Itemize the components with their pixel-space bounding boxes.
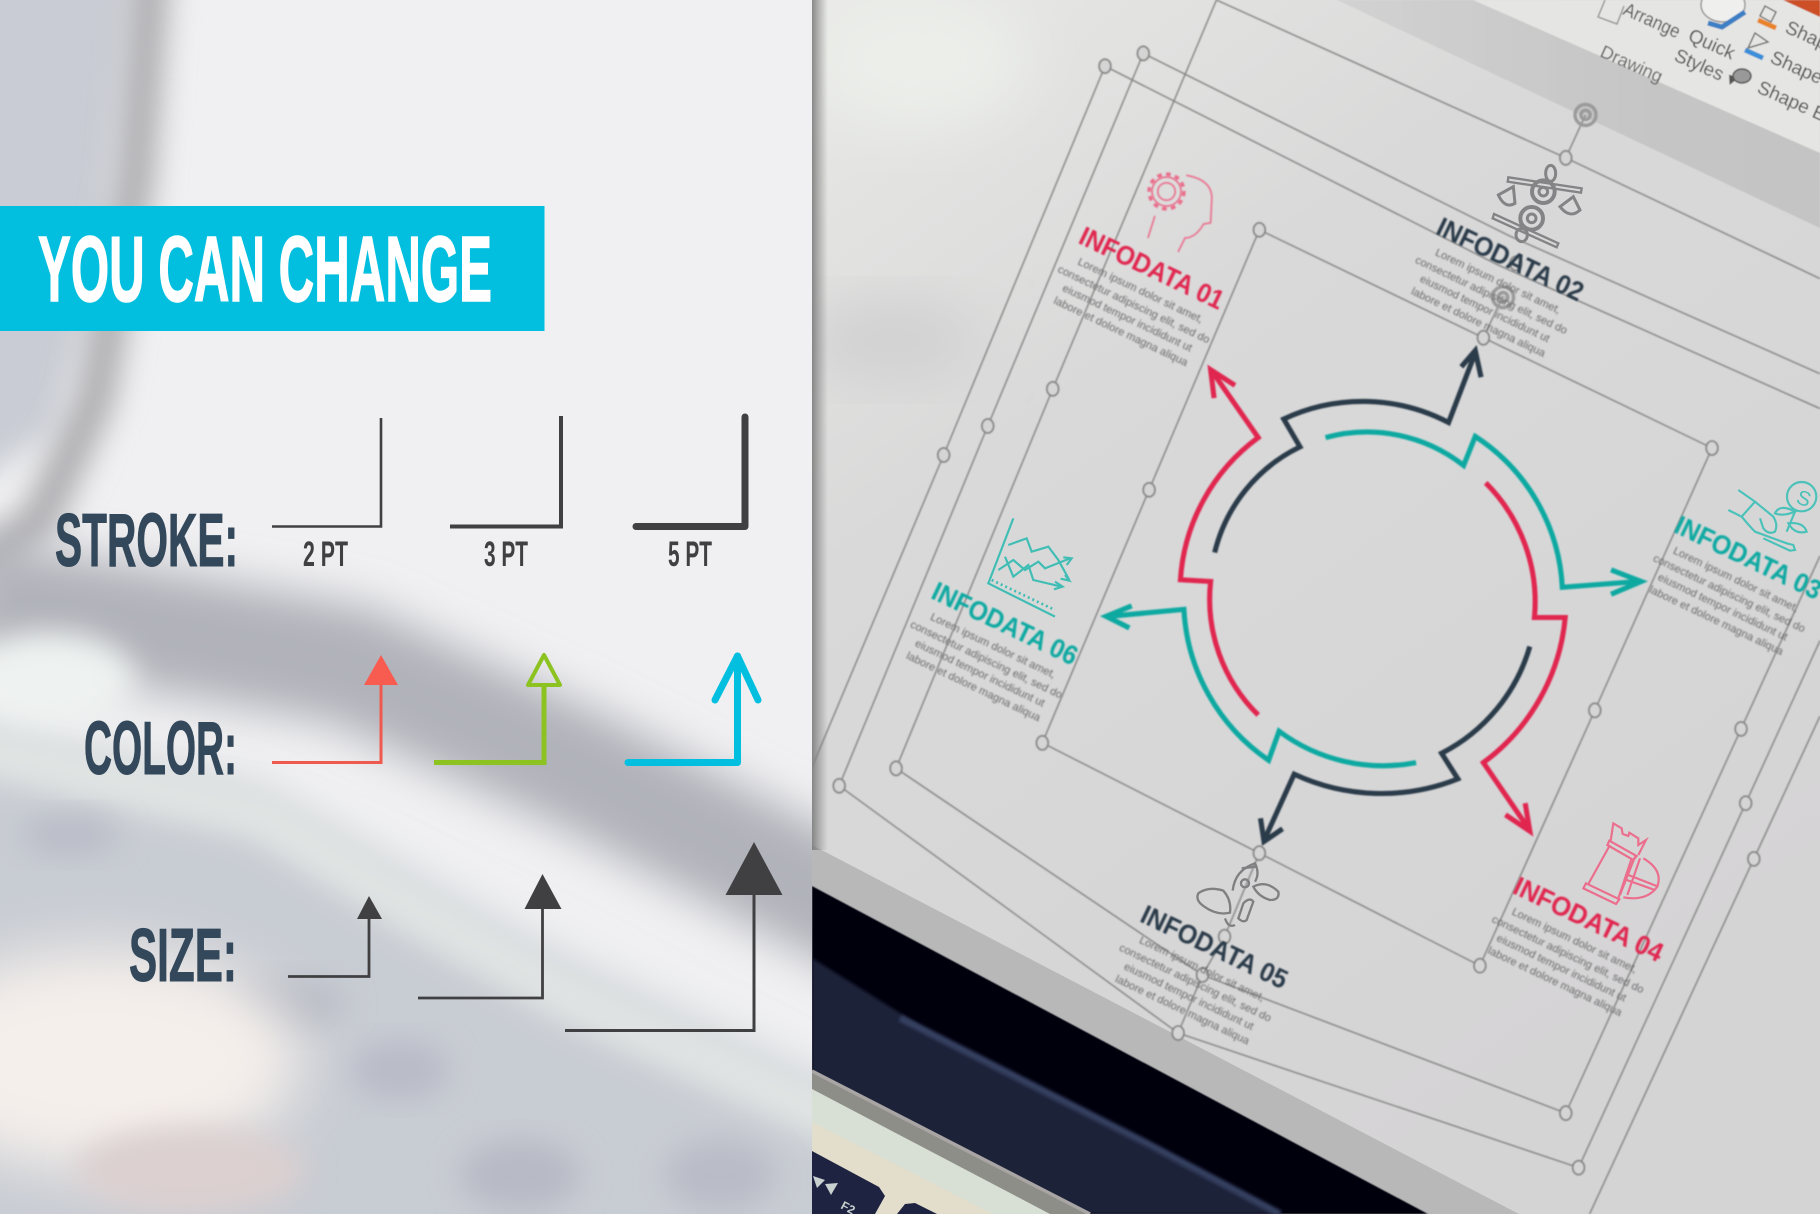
cycle diagram with six arrows	[1106, 351, 1641, 842]
block: infodata 03: eiusmod tempor incididunt ut	[1656, 571, 1790, 644]
stroke sample 2 pt: 2 PT	[303, 535, 348, 574]
icon: rocket and clouds	[1197, 863, 1279, 926]
icon: stock chart	[988, 518, 1072, 617]
ribbon toolbar: Quick	[1685, 25, 1738, 65]
block: infodata 06	[906, 581, 1078, 722]
block: infodata 04: Lorem ipsum dolor sit amet,	[1510, 906, 1639, 976]
selection boxes and handles	[809, 0, 1820, 1214]
label: size: SIZE:	[129, 913, 237, 997]
icon: hand and money plant	[1728, 482, 1816, 551]
block: infodata 03: labore et dolore magna aliqua	[1647, 584, 1786, 658]
block: infodata 06: labore et dolore magna aliqua	[904, 650, 1043, 725]
label: stroke: STROKE:	[55, 498, 238, 582]
stroke sample 2 pt	[272, 418, 381, 574]
block: infodata 04: INFODATA 04	[1509, 871, 1668, 968]
block: infodata 01: eiusmod tempor incididunt ut	[1060, 282, 1195, 355]
block: infodata 03	[1648, 515, 1820, 656]
arrow: infodata 04 red	[1483, 483, 1565, 831]
arrow: infodata 02 navy	[1215, 351, 1481, 552]
block: infodata 01: Lorem ipsum dolor sit amet,	[1076, 256, 1205, 326]
block: infodata 01: INFODATA 01	[1075, 221, 1229, 316]
block: infodata 05: eiusmod tempor incididunt ut	[1122, 961, 1256, 1033]
arrow: infodata 05 navy	[1261, 647, 1530, 842]
block: infodata 01	[1053, 226, 1224, 367]
block: infodata 06: eiusmod tempor incididunt ut	[913, 638, 1047, 710]
arrow: small size	[288, 896, 382, 976]
block: infodata 03: Lorem ipsum dolor sit amet,	[1671, 545, 1800, 615]
block: infodata 02: eiusmod tempor incididunt ut	[1418, 273, 1552, 346]
block: infodata 04: consectetur adipiscing elit, sed do	[1490, 913, 1646, 996]
arrow: infodata 01 red	[1180, 370, 1258, 715]
icon: head with gear	[1148, 174, 1212, 252]
stroke sample 3 pt: 3 PT	[484, 535, 528, 574]
screen background	[800, 0, 1820, 1214]
arrow: large size	[565, 842, 782, 1030]
panel: laptop screen photo	[800, 0, 1820, 1214]
block: infodata 01: labore et dolore magna aliqua	[1052, 295, 1190, 369]
panel: left options panel	[0, 0, 880, 1214]
arrow: blue line head	[628, 656, 758, 762]
block: infodata 02	[1410, 216, 1584, 358]
ribbon toolbar: Arrange	[1620, 0, 1683, 43]
title banner: YOU CAN CHANGE	[38, 217, 492, 321]
block: infodata 02: labore et dolore magna aliqua	[1409, 286, 1548, 360]
arrow: medium size	[418, 874, 562, 998]
block: infodata 04	[1487, 876, 1664, 1017]
title banner	[0, 206, 544, 331]
block: infodata 06: Lorem ipsum dolor sit amet,	[928, 611, 1057, 681]
block: infodata 02: Lorem ipsum dolor sit amet,	[1433, 247, 1562, 317]
arrow: red filled head	[272, 655, 398, 762]
icon: chess rook and shield	[1583, 823, 1659, 904]
stroke sample 5 pt	[636, 417, 745, 574]
block: infodata 02: consectetur adipiscing elit, sed do	[1413, 254, 1569, 337]
label: color: COLOR:	[84, 706, 237, 790]
block: infodata 05	[1114, 904, 1290, 1046]
arrow: infodata 03 teal	[1326, 432, 1641, 594]
arrow: green open head	[434, 655, 560, 762]
icon: balance scale	[1493, 165, 1582, 247]
block: infodata 06: INFODATA 06	[927, 576, 1083, 671]
icon: hand and money plant: S	[1793, 486, 1814, 512]
laptop bezel and keyboard	[812, 845, 1519, 1214]
block: infodata 03: consectetur adipiscing elit, sed do	[1651, 552, 1807, 635]
block: infodata 05: Lorem ipsum dolor sit amet,	[1137, 935, 1266, 1005]
ribbon toolbar	[1337, 0, 1820, 228]
block: infodata 05: labore et dolore magna aliqua	[1113, 973, 1252, 1048]
stroke sample 5 pt: 5 PT	[668, 535, 712, 574]
stroke sample 3 pt	[450, 416, 561, 574]
block: infodata 01: consectetur adipiscing elit, sed do	[1056, 263, 1212, 346]
block: infodata 04: labore et dolore magna aliqua	[1486, 945, 1624, 1019]
block: infodata 04: eiusmod tempor incididunt ut	[1494, 932, 1629, 1005]
block: infodata 05: INFODATA 05	[1136, 899, 1293, 995]
block: infodata 05: consectetur adipiscing elit, sed do	[1117, 942, 1273, 1025]
arrow: infodata 06 teal	[1106, 606, 1416, 766]
left shadow	[812, 0, 828, 850]
ribbon toolbar: Drawing	[1597, 41, 1666, 87]
block: infodata 06: consectetur adipiscing elit, sed do	[908, 619, 1064, 701]
ribbon toolbar: Styles ▾	[1671, 45, 1741, 92]
blurred photo background	[0, 0, 880, 1214]
block: infodata 02: INFODATA 02	[1432, 212, 1588, 307]
